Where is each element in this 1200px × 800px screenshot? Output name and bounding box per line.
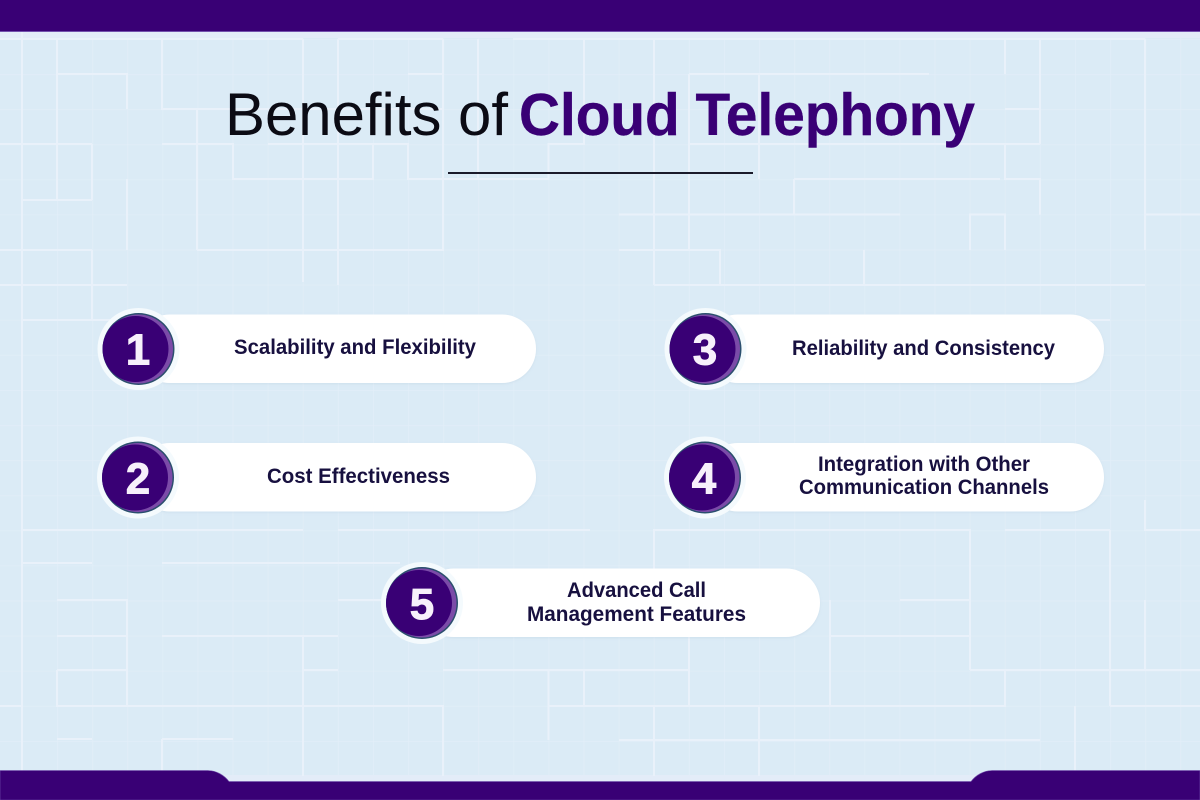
badge 5	[381, 562, 463, 644]
badge 4: 4	[692, 454, 717, 504]
title	[225, 81, 975, 148]
top band	[0, 0, 1200, 32]
label 5: Advanced Call	[567, 578, 706, 602]
badge 2	[97, 436, 179, 518]
pill 3	[704, 314, 1104, 383]
label 1: Scalability and Flexibility	[234, 335, 476, 359]
title underline	[448, 172, 753, 174]
label 5: Management Features	[527, 602, 746, 626]
bottom band	[0, 770, 1200, 800]
pill 5	[420, 568, 820, 637]
item 4	[664, 436, 1104, 518]
item 1	[98, 308, 536, 390]
label 5	[527, 578, 746, 626]
title: Benefits of	[225, 81, 508, 148]
label 3: Reliability and Consistency	[792, 336, 1055, 360]
item 2	[97, 436, 536, 518]
badge 3	[664, 308, 746, 390]
pill 2	[136, 443, 536, 512]
badge 1	[98, 308, 180, 390]
badge 4	[664, 436, 746, 518]
label 2: Cost Effectiveness	[267, 464, 450, 488]
pill 4	[704, 443, 1104, 512]
badge 5: 5	[410, 580, 434, 629]
item 5	[381, 562, 820, 644]
title: Cloud Telephony	[519, 82, 975, 148]
pill 1	[136, 314, 536, 383]
badge 3: 3	[693, 326, 717, 374]
item 3	[664, 308, 1104, 390]
badge 2: 2	[126, 454, 150, 504]
badge 1: 1	[126, 326, 150, 374]
label 4: Integration with Other	[818, 452, 1031, 476]
label 4: Communication Channels	[799, 475, 1049, 499]
label 4	[799, 452, 1049, 499]
